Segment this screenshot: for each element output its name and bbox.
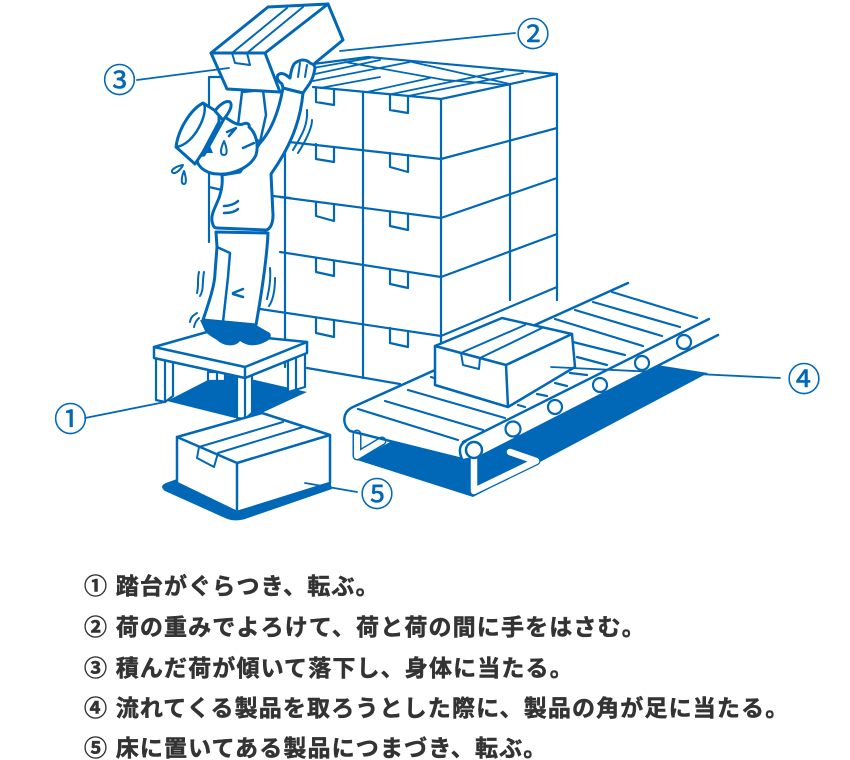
cap [176, 103, 219, 164]
caption 1: ① 踏台がぐらつき、転ぶ。 [84, 573, 380, 599]
number labels: ③ [103, 54, 136, 102]
trousers [203, 232, 268, 325]
leader lines [85, 33, 780, 492]
hand [277, 60, 315, 93]
illustration: worker on step stool with boxes and conveyor [54, 2, 820, 520]
number labels: ④ [788, 353, 820, 401]
number labels: ② [516, 8, 550, 56]
number labels: ⑤ [360, 468, 394, 516]
face details [227, 128, 254, 148]
box being lifted [211, 4, 343, 92]
torso and raised arm [212, 88, 303, 230]
sweat drops [172, 165, 186, 184]
caption 4: ④ 流れてくる製品を取ろうとした際に、製品の角が足に当たる。 [84, 695, 789, 721]
conveyor box [435, 318, 575, 407]
head [197, 117, 257, 174]
step stool [154, 332, 307, 419]
worker [172, 60, 315, 345]
conveyor [344, 283, 718, 497]
stacked boxes [209, 57, 557, 390]
floor box [162, 413, 332, 520]
shake lines [190, 110, 312, 327]
caption 3: ③ 積んだ荷が傾いて落下し、身体に当たる。 [84, 655, 574, 681]
caption 2: ② 荷の重みでよろけて、荷と荷の間に手をはさむ。 [84, 614, 646, 640]
shoes [200, 320, 271, 345]
number labels [54, 8, 820, 516]
number labels: ① [54, 393, 87, 441]
raised far arm [238, 90, 266, 142]
